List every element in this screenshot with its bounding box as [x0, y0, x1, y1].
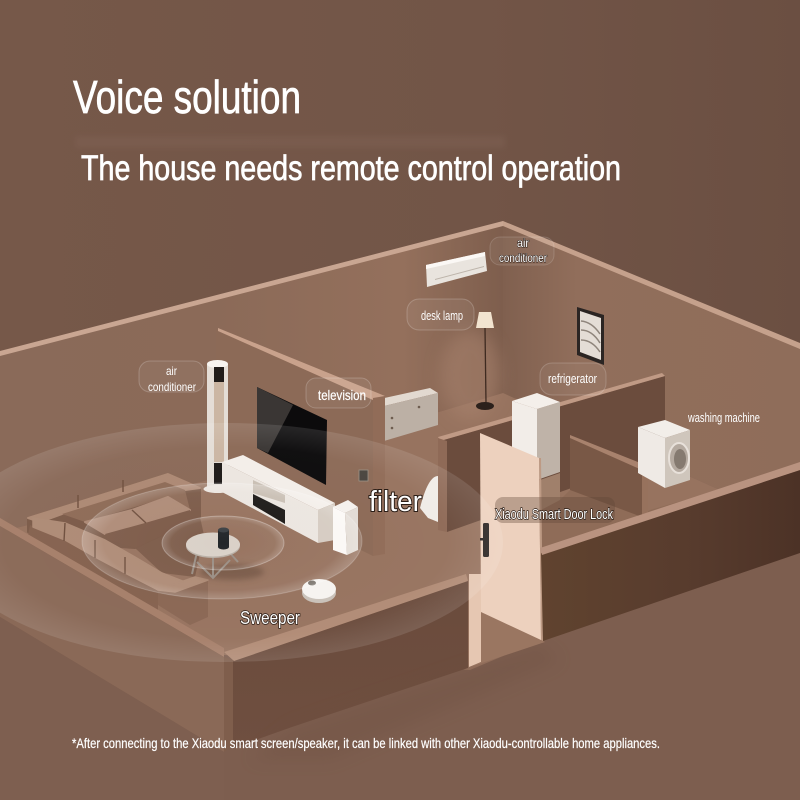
right front wall top edge	[540, 462, 800, 555]
house model	[0, 221, 800, 800]
backrest inner face	[62, 482, 190, 522]
tower air conditioner	[204, 360, 232, 493]
seat front	[105, 510, 190, 548]
refrigerator	[512, 393, 560, 530]
label: air conditioner wall: conditioner	[499, 251, 547, 265]
wall switch	[359, 470, 368, 481]
air conditioner wall unit	[426, 252, 487, 287]
cabinet	[380, 388, 438, 441]
left back wall	[0, 225, 503, 532]
label: air conditioner tower: air	[166, 364, 177, 378]
inner partition wall	[570, 435, 648, 517]
living room partition wall	[216, 328, 385, 556]
label: desk lamp: desk lamp	[421, 308, 463, 323]
label: air conditioner wall: air	[517, 236, 529, 250]
sofa	[28, 474, 208, 625]
front wall top edge	[224, 574, 468, 661]
label: sweeper: Sweeper	[240, 608, 300, 628]
small appliance behind wall	[420, 476, 438, 522]
outer ring	[0, 423, 503, 662]
title smudge band	[75, 136, 505, 148]
left outer wall face	[0, 526, 224, 752]
subtitle: The house needs remote control operation	[81, 149, 621, 188]
voice wave rings	[0, 423, 503, 662]
footnote: *After connecting to the Xiaodu smart screen/speaker, it can be linked with other Xiaodu-controllable home appliances.	[72, 735, 660, 751]
inner floor section	[541, 490, 740, 556]
backrest top	[28, 474, 200, 522]
label: desk lamp	[407, 299, 474, 330]
title: Voice solution	[73, 71, 301, 123]
left wall lower shade	[0, 617, 224, 800]
label: washing machine: washing machine	[687, 410, 760, 425]
smart speaker	[218, 528, 229, 550]
floor shadow beside sofa	[135, 517, 204, 577]
coffee table	[186, 532, 240, 578]
label: air conditioner wall	[490, 236, 554, 265]
television	[257, 387, 327, 485]
left wall top band	[0, 518, 224, 657]
doorway strip	[469, 574, 481, 667]
robot sweeper	[302, 579, 336, 603]
wall top edge right	[503, 221, 800, 349]
lamp glow	[440, 330, 500, 420]
upper background tone	[0, 0, 800, 400]
cushion seams	[64, 480, 146, 574]
floor shadow under table	[200, 564, 264, 580]
wall top edge left	[0, 221, 503, 356]
open door	[480, 433, 543, 641]
front section face	[28, 525, 158, 611]
tv stand	[222, 455, 335, 543]
shadow below front wall	[250, 645, 560, 760]
label: filter: filter	[369, 486, 422, 518]
end arm top	[158, 577, 208, 592]
front section top	[33, 518, 185, 590]
right back wall	[503, 225, 800, 490]
floor	[0, 393, 800, 670]
label: television	[306, 378, 371, 408]
right front wall face	[541, 470, 800, 641]
seat top	[85, 497, 190, 534]
smart door lock	[480, 523, 489, 557]
end arm face	[158, 580, 208, 625]
inner ring	[162, 516, 284, 570]
wall picture	[577, 307, 604, 365]
label: refrigerator	[540, 363, 606, 395]
label: television: television	[318, 387, 366, 403]
label: air conditioner tower: conditioner	[148, 380, 196, 394]
label: smart door lock	[495, 497, 615, 523]
label: air conditioner tower	[139, 361, 204, 394]
label: refrigerator: refrigerator	[548, 371, 598, 386]
washing machine	[638, 420, 690, 488]
doorway floor	[470, 612, 545, 667]
sofa back body	[28, 474, 200, 548]
front wall face	[233, 580, 468, 748]
label: smart door lock: Xiaodu Smart Door Lock	[495, 506, 613, 523]
front wall corner strip	[224, 657, 234, 752]
mid partition wall	[438, 373, 665, 532]
floor lamp	[476, 312, 494, 410]
air purifier	[333, 500, 358, 555]
middle ring	[82, 483, 362, 599]
